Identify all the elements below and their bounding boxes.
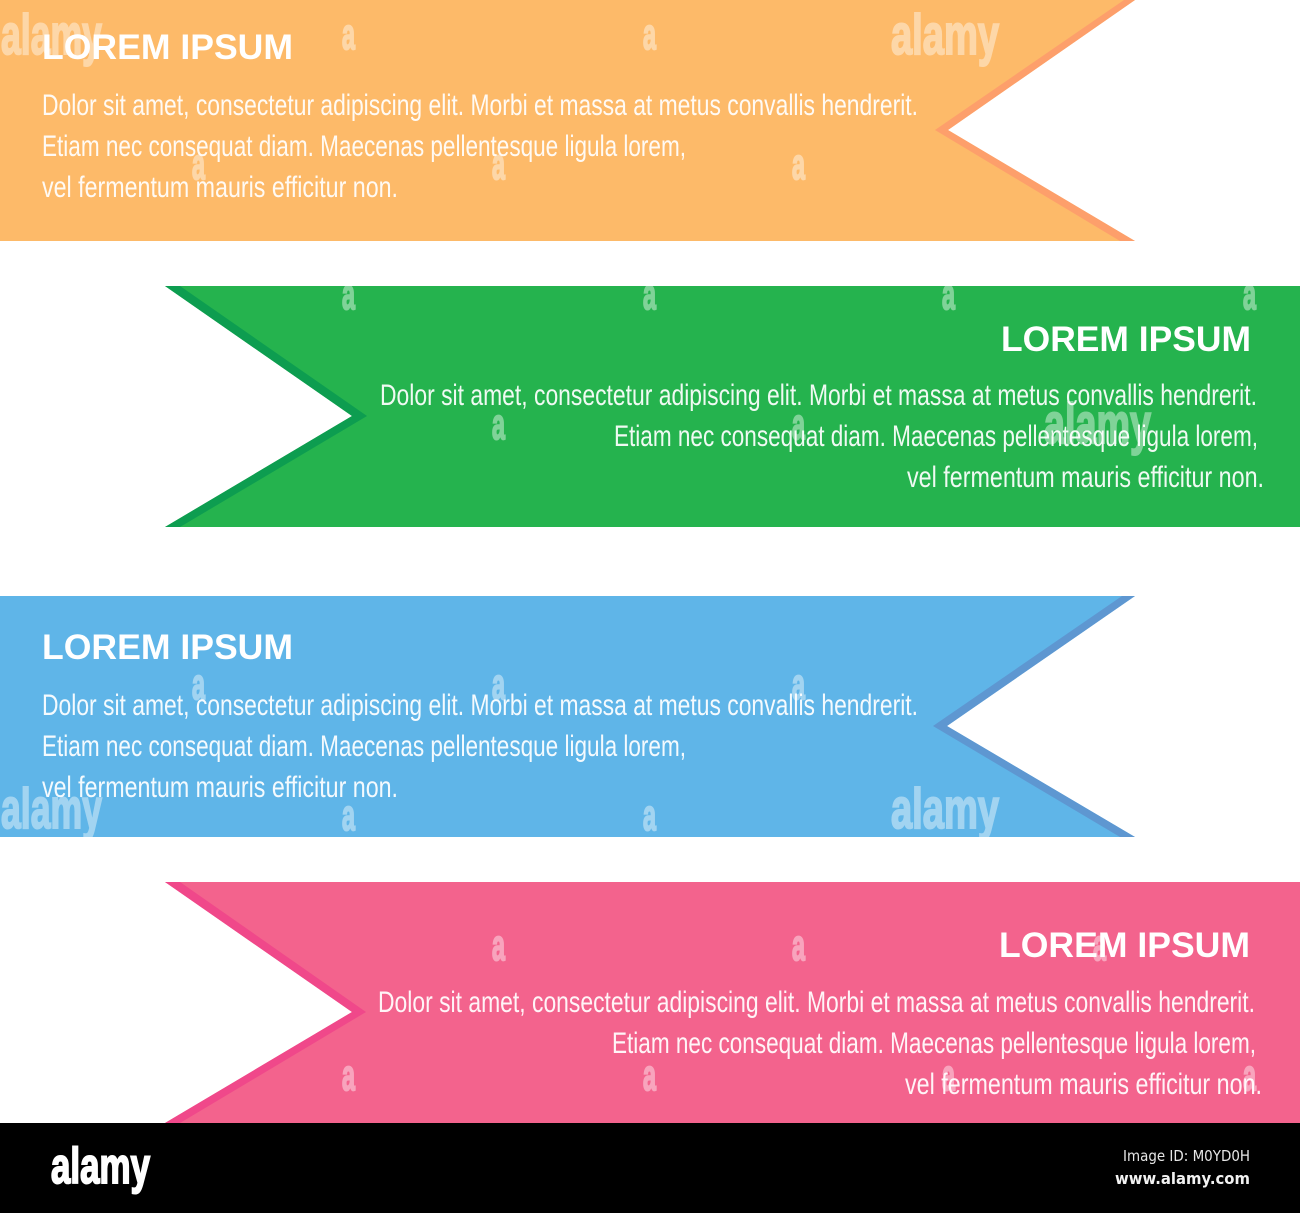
watermarks: pink ribbon: a — [643, 1051, 656, 1100]
watermarks: green ribbon: a — [792, 400, 805, 449]
heading: orange ribbon: LOREM IPSUM — [42, 28, 293, 67]
panel: orange ribbon — [0, 0, 1135, 241]
watermarks: blue ribbon: a — [192, 660, 205, 709]
text block: blue ribbon: vel fermentum mauris efficitur non. — [42, 771, 398, 804]
watermarks: blue ribbon: a — [492, 660, 505, 709]
watermarks: green ribbon: a — [342, 270, 355, 319]
watermarks: orange ribbon: a — [342, 10, 355, 59]
watermarks: pink ribbon — [342, 921, 1256, 1100]
watermarks: pink ribbon: a — [342, 1051, 355, 1100]
watermarks: orange ribbon: a — [643, 10, 656, 59]
watermarks: orange ribbon: alamy — [1, 3, 102, 67]
panel: pink ribbon — [165, 882, 1300, 1123]
watermarks: pink ribbon: a — [1093, 921, 1106, 970]
footer logo: alamy — [51, 1138, 150, 1194]
watermarks: pink ribbon: a — [942, 1051, 955, 1100]
text block: blue ribbon: Dolor sit amet, consectetur adipiscing elit. Morbi et massa at metus convallis hendrerit. — [42, 689, 918, 722]
heading: pink ribbon: LOREM IPSUM — [999, 926, 1250, 965]
text block: green ribbon — [380, 379, 1264, 494]
image id: Image ID: M0YD0H — [1123, 1147, 1250, 1165]
watermarks: pink ribbon: a — [492, 921, 505, 970]
watermarks: green ribbon: alamy — [1044, 392, 1151, 456]
text block: orange ribbon — [42, 89, 918, 204]
watermarks: green ribbon: a — [643, 270, 656, 319]
text block: orange ribbon: Dolor sit amet, consectetur adipiscing elit. Morbi et massa at metus convallis hendrerit. — [42, 89, 918, 122]
watermarks: blue ribbon — [1, 660, 999, 841]
heading: blue ribbon: LOREM IPSUM — [42, 628, 293, 667]
watermarks: orange ribbon: a — [492, 140, 505, 189]
heading: green ribbon: LOREM IPSUM — [1001, 320, 1251, 359]
panel: green ribbon — [165, 270, 1300, 527]
watermarks: blue ribbon: alamy — [891, 777, 999, 841]
watermarks: green ribbon: a — [1243, 270, 1256, 319]
watermarks: orange ribbon: a — [192, 140, 205, 189]
watermarks: blue ribbon: alamy — [1, 777, 102, 841]
watermarks: pink ribbon: a — [792, 921, 805, 970]
text block: orange ribbon: vel fermentum mauris efficitur non. — [42, 171, 398, 204]
watermarks: green ribbon: a — [492, 400, 505, 449]
watermarks: blue ribbon: a — [792, 660, 805, 709]
website url: www.alamy.com — [1115, 1169, 1250, 1188]
watermarks: green ribbon: a — [942, 270, 955, 319]
watermarks: blue ribbon: a — [643, 791, 656, 840]
watermarks: pink ribbon: a — [1243, 1051, 1256, 1100]
text block: pink ribbon — [378, 986, 1262, 1101]
footer bar — [0, 1123, 1300, 1213]
text block: blue ribbon: Etiam nec consequat diam. Maecenas pellentesque ligula lorem, — [42, 730, 686, 763]
panel: blue ribbon — [0, 596, 1135, 841]
watermarks: orange ribbon — [1, 3, 999, 189]
text block: orange ribbon: Etiam nec consequat diam. Maecenas pellentesque ligula lorem, — [42, 130, 686, 163]
watermarks: orange ribbon: alamy — [891, 3, 999, 67]
watermarks: green ribbon — [342, 270, 1256, 456]
text block: blue ribbon — [42, 689, 918, 804]
watermarks: blue ribbon: a — [342, 791, 355, 840]
watermarks: orange ribbon: a — [792, 140, 805, 189]
